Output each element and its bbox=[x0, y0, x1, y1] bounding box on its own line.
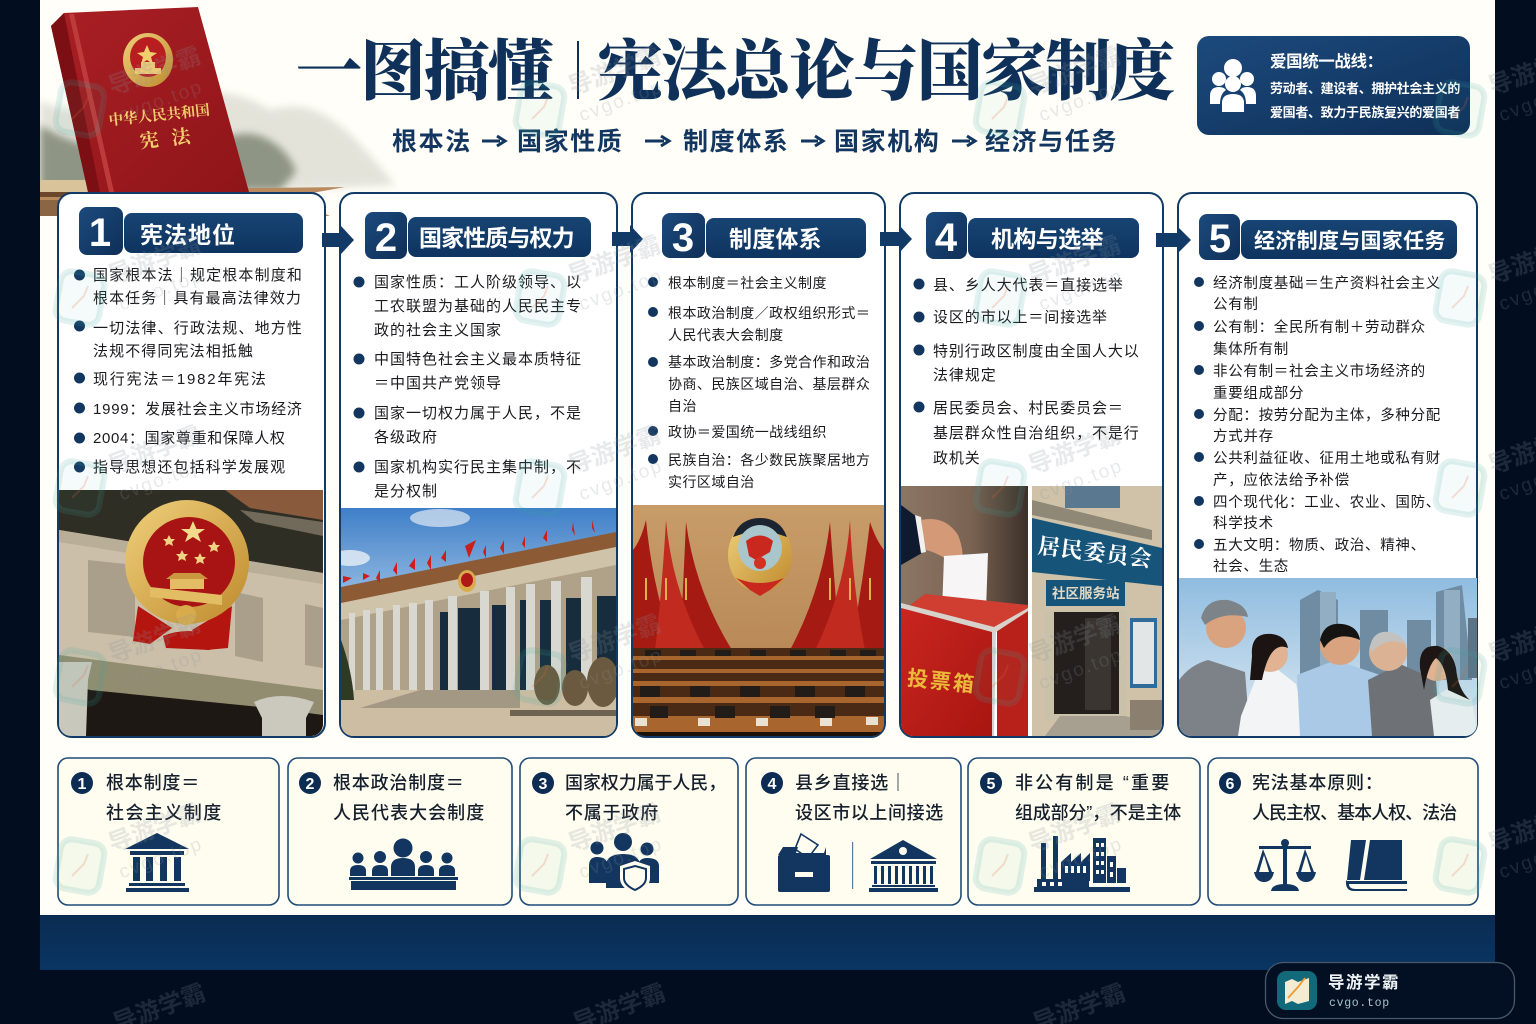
panel 4 photo: residents committee: 社区服务站 bbox=[1052, 585, 1120, 601]
panel 4 bullets: 设区的市以上＝间接选举 bbox=[933, 309, 1108, 326]
summary card 2 bbox=[288, 758, 512, 905]
icon: people with shield bbox=[589, 833, 659, 894]
constitution book bbox=[51, 7, 249, 192]
summary card 4: 县乡直接选｜ bbox=[795, 773, 908, 793]
panel 1 badge: 宪法地位 bbox=[140, 222, 236, 248]
panel 2 badge: 国家性质与权力 bbox=[419, 225, 574, 251]
title: 宪法总论与国家制度 bbox=[597, 35, 1174, 109]
watermark layer: cvgo.top bbox=[576, 644, 666, 694]
panel 5 bullets: 社会、生态 bbox=[1213, 558, 1289, 575]
summary card 6: 6 bbox=[1226, 776, 1235, 793]
emblem bbox=[125, 500, 249, 650]
watermark layer: 导游学霸 bbox=[565, 232, 664, 290]
icon: people group bbox=[1210, 59, 1256, 112]
panel 3 bullets: 政协＝爱国统一战线组织 bbox=[668, 424, 827, 440]
summary card 6: 宪法基本原则： bbox=[1252, 772, 1384, 793]
panel 5 bullets: 方式并存 bbox=[1213, 428, 1274, 445]
panel 4 bullets: 法律规定 bbox=[933, 367, 997, 384]
icon: factory bbox=[1034, 836, 1130, 892]
watermark layer: cvgo.top bbox=[576, 833, 666, 883]
panel 1 bullets bbox=[74, 267, 303, 476]
summary card 1: 根本制度＝ bbox=[106, 773, 200, 793]
panel 4 bullets: 基层群众性自治组织，不是行 bbox=[933, 425, 1140, 442]
watermark layer: 导游学霸 bbox=[565, 611, 664, 669]
people bbox=[1179, 600, 1477, 736]
panel 3 badge: 制度体系 bbox=[729, 226, 822, 252]
book emblem bbox=[123, 33, 173, 87]
watermark layer: 导游学霸 bbox=[565, 800, 664, 858]
panel 2 bullets: 国家一切权力属于人民，不是 bbox=[374, 405, 582, 422]
panel 4 photo: residents committee bbox=[1032, 486, 1162, 736]
panel 1: constitution status bbox=[58, 193, 325, 737]
summary card 3: 不属于政府 bbox=[565, 802, 659, 823]
watermark layer: 导游学霸 bbox=[1025, 232, 1124, 290]
brand badge bbox=[1266, 962, 1514, 1018]
title: 一图搞懂 bbox=[296, 36, 553, 109]
panel 2 bullets bbox=[354, 274, 582, 500]
icon: book bbox=[1346, 840, 1407, 891]
red flags bbox=[633, 520, 884, 650]
summary card 2: 人民代表大会制度 bbox=[333, 803, 485, 823]
summary card 4: 设区市以上间接选 bbox=[795, 803, 944, 823]
watermark layer: 导游学霸 bbox=[105, 800, 204, 858]
watermark layer: cvgo.top bbox=[116, 76, 206, 126]
panel 1 bullets: 指导思想还包括科学发展观 bbox=[93, 459, 286, 476]
panel 4 badge: 机构与选举 bbox=[991, 226, 1104, 252]
summary card 4: 4 bbox=[768, 776, 777, 793]
CPPCC emblem bbox=[728, 518, 792, 596]
panel 5 badge bbox=[1199, 214, 1457, 261]
panel 3 bullets bbox=[648, 275, 870, 490]
watermark layer: cvgo.top bbox=[116, 265, 206, 315]
watermark layer: 导游学霸 bbox=[105, 611, 204, 669]
panel 4 photo: ballot box: 投票箱 bbox=[906, 667, 977, 697]
watermark layer: 导游学霸 bbox=[105, 422, 204, 480]
icon: delegates at table bbox=[349, 838, 458, 890]
panel 4 bullets: 居民委员会、村民委员会＝ bbox=[933, 400, 1124, 417]
panel 3 bullets: 根本制度＝社会主义制度 bbox=[668, 275, 827, 291]
summary card 1: 社会主义制度 bbox=[106, 803, 222, 823]
panel 5 badge: 5 bbox=[1209, 217, 1231, 261]
panel 1 bullets: 一切法律、行政法规、地方性 bbox=[93, 320, 303, 337]
panel 2 bullets: 中国特色社会主义最本质特征 bbox=[374, 351, 582, 368]
watermark layer: 导游学霸 bbox=[105, 232, 204, 290]
summary card 5 bbox=[968, 758, 1200, 905]
panel 5 bullets: 公共利益征收、征用土地或私有财 bbox=[1213, 450, 1441, 467]
panel 2 badge: 2 bbox=[375, 216, 397, 260]
arrow 4 to 5 bbox=[1156, 226, 1191, 254]
panel 2 bullets: 各级政府 bbox=[374, 429, 438, 446]
footer band bbox=[40, 915, 1495, 970]
panel 5 bullets: 产，应依法给予补偿 bbox=[1213, 471, 1350, 489]
panel 5 bullets: 四个现代化：工业、农业、国防、 bbox=[1213, 494, 1441, 511]
panel 3 bullets: 协商、民族区域自治、基层群众 bbox=[668, 376, 870, 392]
brand badge: cvgo.top bbox=[1329, 997, 1390, 1010]
panel 5 bullets bbox=[1194, 275, 1441, 575]
summary card 2: 2 bbox=[306, 776, 315, 793]
subtitle flow: 根本法 bbox=[392, 128, 472, 156]
summary card 5: 5 bbox=[987, 776, 996, 793]
subtitle flow bbox=[392, 128, 1118, 156]
panel 5 photo: five citizens and skyline bbox=[1179, 578, 1477, 736]
icon: scales of justice bbox=[1254, 839, 1316, 891]
panel 3 bullets: 民族自治：各少数民族聚居地方 bbox=[668, 452, 870, 468]
panel 1 photo: national emblem on facade bbox=[59, 490, 323, 736]
summary card 1 bbox=[58, 758, 279, 905]
callout: patriotic united front bbox=[1197, 36, 1470, 135]
panel 5: economy and national tasks bbox=[1178, 193, 1477, 737]
panel 1 badge bbox=[79, 207, 303, 255]
summary card 3 bbox=[520, 758, 738, 905]
watermark layer: cvgo.top bbox=[116, 644, 206, 694]
panel 1 badge: 1 bbox=[89, 211, 111, 255]
panel 5 bullets: 非公有制＝社会主义市场经济的 bbox=[1213, 363, 1426, 380]
summary card 5: 非公有制是 “重要 bbox=[1015, 773, 1170, 793]
watermark layer: cvgo.top bbox=[1036, 455, 1126, 505]
panel 2 bullets: 政的社会主义国家 bbox=[374, 322, 502, 339]
watermark layer: 导游学霸 bbox=[1025, 800, 1124, 858]
panel 2 bullets: 工农联盟为基础的人民民主专 bbox=[374, 298, 582, 315]
watermark layer: cvgo.top bbox=[1036, 76, 1126, 126]
arrow 1 to 2 bbox=[322, 226, 354, 254]
panel 4 bullets: 政机关 bbox=[933, 450, 981, 467]
icon: temple bbox=[125, 833, 189, 892]
watermark layer: cvgo.top bbox=[576, 265, 666, 315]
panel 5 bullets: 科学技术 bbox=[1213, 515, 1274, 532]
panel 3: institutional system bbox=[632, 193, 885, 737]
panel 3 bullets: 人民代表大会制度 bbox=[668, 327, 784, 343]
panel 1 bullets: 国家根本法｜规定根本制度和 bbox=[93, 267, 303, 284]
brand badge: 导游学霸 bbox=[1328, 972, 1400, 992]
subtitle flow: 经济与任务 bbox=[985, 128, 1118, 156]
summary card 6: 人民主权、基本人权、法治 bbox=[1252, 803, 1458, 823]
watermark layer: 导游学霸 bbox=[1025, 43, 1124, 101]
watermark layer: 导游学霸 bbox=[1025, 611, 1124, 669]
panel 1 bullets: 现行宪法＝1982年宪法 bbox=[93, 371, 267, 388]
summary card 1: 1 bbox=[78, 776, 87, 793]
panel 5 bullets: 重要组成部分 bbox=[1213, 385, 1304, 402]
panel 2 badge bbox=[365, 212, 591, 260]
panel 3 badge: 3 bbox=[672, 216, 694, 260]
watermark layer: cvgo.top bbox=[576, 76, 666, 126]
summary card 5: 组成部分”，不是主体 bbox=[1015, 803, 1182, 823]
header landscape illustration bbox=[40, 92, 395, 216]
panel 5 bullets: 经济制度基础＝生产资料社会主义 bbox=[1213, 275, 1441, 292]
panel 4 bullets: 特别行政区制度由全国人大以 bbox=[933, 342, 1140, 360]
panel 3 bullets: 自治 bbox=[668, 398, 697, 414]
watermark layer: 导游学霸 bbox=[565, 422, 664, 480]
panel 3 bullets: 基本政治制度：多党合作和政治 bbox=[668, 354, 870, 370]
title bbox=[296, 35, 1174, 109]
watermark layer: 导游学霸 bbox=[565, 43, 664, 101]
panel 2 bullets: 国家机构实行民主集中制，不 bbox=[374, 459, 582, 476]
panel 4 badge bbox=[926, 212, 1139, 260]
panel 5 bullets: 五大文明：物质、政治、精神、 bbox=[1213, 537, 1426, 554]
panel 3 bullets: 实行区域自治 bbox=[668, 474, 755, 490]
panel 5 bullets: 集体所有制 bbox=[1213, 341, 1289, 358]
subtitle flow: 国家性质 bbox=[517, 128, 623, 156]
watermark layer: cvgo.top bbox=[1036, 644, 1126, 694]
panel 4 badge: 4 bbox=[935, 216, 958, 260]
summary card 4 bbox=[746, 758, 961, 905]
panel 2 photo: great hall bbox=[330, 508, 619, 736]
panel 5 bullets: 公有制 bbox=[1213, 296, 1259, 313]
panel 2 bullets: 是分权制 bbox=[374, 483, 438, 500]
panel 2 bullets: ＝中国共产党领导 bbox=[374, 375, 502, 392]
panel 4: organs and elections bbox=[900, 193, 1163, 737]
book title: 中华人民共和国 bbox=[108, 101, 211, 129]
watermark layer: cvgo.top bbox=[116, 833, 206, 883]
panel 5 bullets: 分配：按劳分配为主体，多种分配 bbox=[1213, 407, 1441, 424]
summary card 6 bbox=[1208, 758, 1478, 905]
callout: patriotic united front: 爱国者、致力于民族复兴的爱国者 bbox=[1270, 105, 1460, 120]
subtitle flow: 国家机构 bbox=[834, 128, 940, 156]
panel 4 photo: ballot box bbox=[901, 486, 1028, 736]
icon: ballot box bbox=[778, 834, 830, 892]
callout: patriotic united front: 劳动者、建设者、拥护社会主义的 bbox=[1270, 81, 1460, 96]
subtitle flow: 制度体系 bbox=[683, 128, 789, 156]
watermark layer: 导游学霸 bbox=[105, 43, 204, 101]
watermark layer: cvgo.top bbox=[1036, 265, 1126, 315]
panel 2: state nature and power bbox=[330, 193, 619, 737]
panel 4 photo: residents committee: 居民委员会 bbox=[1037, 533, 1154, 572]
panel 4 bullets: 县、乡人大代表＝直接选举 bbox=[933, 277, 1124, 294]
panel 3 bullets: 根本政治制度／政权组织形式＝ bbox=[668, 305, 870, 321]
arrow 2 to 3 bbox=[612, 225, 643, 253]
panel 2 bullets: 国家性质：工人阶级领导、以 bbox=[374, 274, 582, 291]
panel 5 badge: 经济制度与国家任务 bbox=[1254, 229, 1446, 253]
panel 3 badge bbox=[662, 213, 866, 260]
summary card 3: 3 bbox=[539, 776, 548, 793]
panel 4 bullets bbox=[914, 277, 1140, 467]
watermark layer: cvgo.top bbox=[576, 455, 666, 505]
watermark layer: 导游学霸 bbox=[1025, 422, 1124, 480]
summary card 2: 根本政治制度＝ bbox=[333, 773, 465, 793]
arrow 3 to 4 bbox=[880, 225, 912, 253]
callout: patriotic united front: 爱国统一战线： bbox=[1270, 51, 1383, 71]
book subtitle: 宪 法 bbox=[139, 124, 195, 153]
brand logo bbox=[1277, 971, 1317, 1010]
panel 1 bullets: 法规不得同宪法相抵触 bbox=[93, 343, 254, 360]
summary card 3: 国家权力属于人民， bbox=[565, 773, 727, 793]
panel 3 photo: CPPCC hall bbox=[633, 505, 884, 736]
watermark layer: cvgo.top bbox=[116, 455, 206, 505]
icon: government building bbox=[869, 840, 938, 892]
panel 1 bullets: 1999：发展社会主义市场经济 bbox=[93, 401, 303, 418]
panel 1 bullets: 根本任务｜具有最高法律效力 bbox=[93, 290, 302, 307]
watermark layer: cvgo.top bbox=[1036, 833, 1126, 883]
panel 1 bullets: 2004：国家尊重和保障人权 bbox=[93, 429, 286, 447]
panel 5 bullets: 公有制：全民所有制＋劳动群众 bbox=[1213, 318, 1426, 336]
